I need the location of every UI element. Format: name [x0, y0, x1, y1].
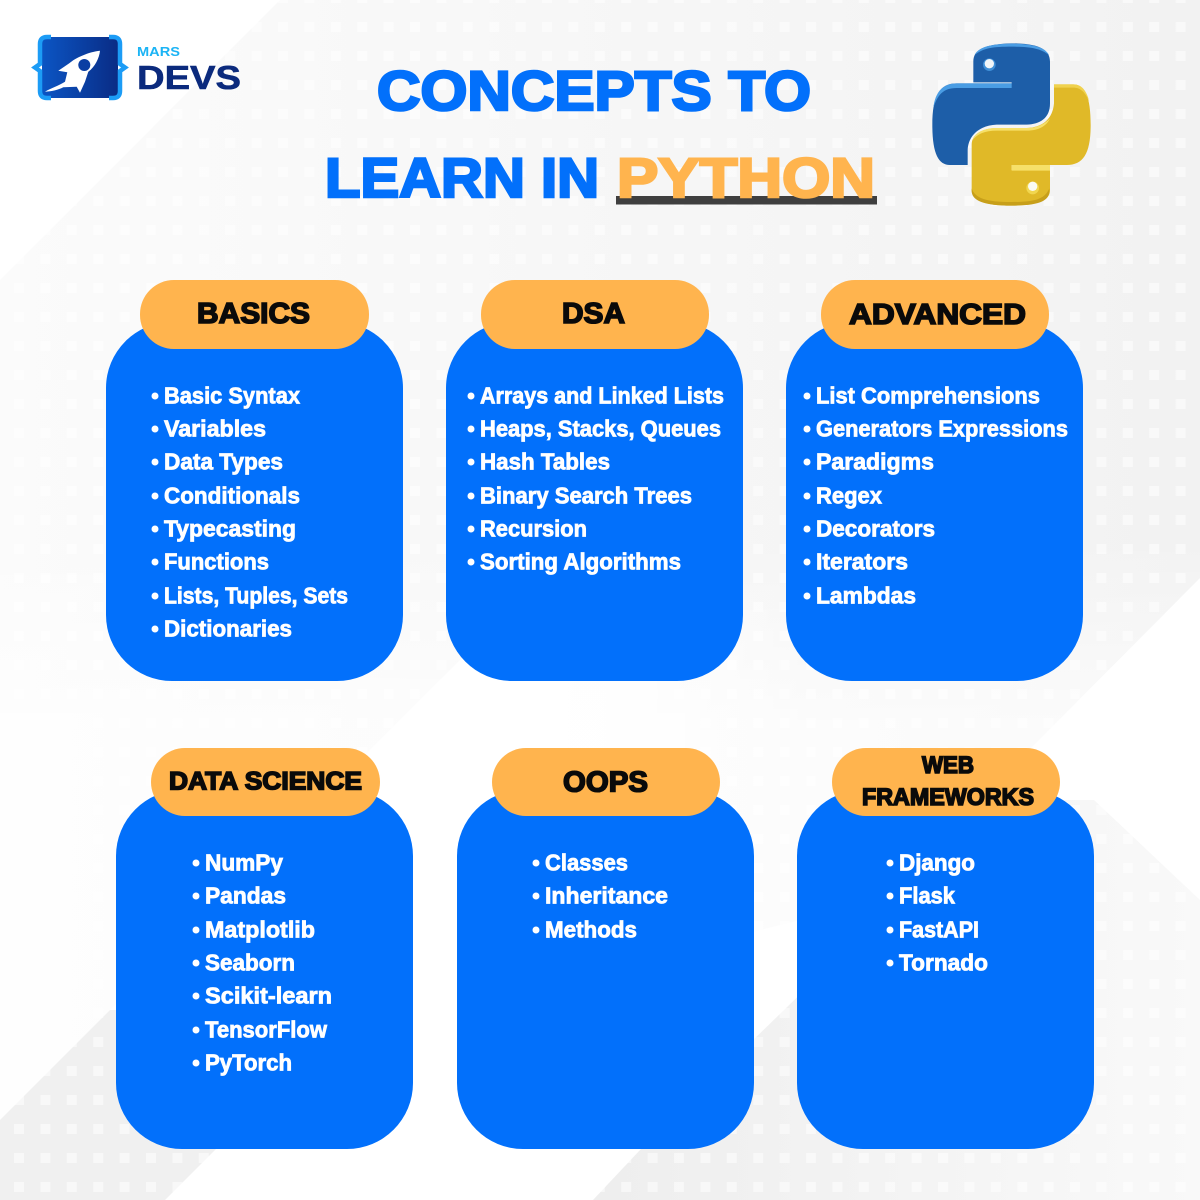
icon: python logo [932, 43, 1091, 206]
list: Binary Search Trees [480, 482, 692, 508]
list: Heaps, Stacks, Queues [480, 416, 721, 442]
pill [481, 280, 709, 349]
list: Dictionaries [164, 616, 292, 642]
panel: basics [106, 280, 403, 681]
list: Flask [899, 882, 955, 908]
icon: rocket in braces [35, 37, 125, 98]
list [532, 850, 668, 942]
pill [151, 748, 380, 816]
logo: Mars Devs [35, 37, 241, 98]
logo text: MARS: MARS [137, 44, 180, 59]
list [152, 382, 348, 642]
panel: dsa [446, 280, 743, 681]
list [804, 382, 1068, 608]
title line 1: CONCEPTS TO [377, 59, 811, 122]
heading line 1: WEB [922, 752, 974, 779]
list: Basic Syntax [164, 382, 300, 408]
list: Arrays and Linked Lists [480, 382, 724, 408]
card [446, 322, 743, 681]
panel: oops [457, 748, 754, 1149]
list: Django [899, 850, 975, 876]
panel: web frameworks [797, 748, 1094, 1149]
list: Seaborn [205, 950, 295, 976]
list [468, 382, 724, 574]
list: Lambdas [816, 582, 916, 608]
heading: OOPS [563, 766, 648, 798]
list: Typecasting [164, 516, 296, 542]
list: Variables [164, 416, 266, 442]
panel: data science [116, 748, 413, 1149]
list: Iterators [816, 548, 908, 574]
list: Lists, Tuples, Sets [164, 582, 348, 608]
list: Generators Expressions [816, 416, 1068, 442]
list: Scikit-learn [205, 982, 332, 1008]
list: Decorators [816, 516, 935, 542]
list [886, 850, 988, 976]
card [116, 790, 413, 1149]
heading: DATA SCIENCE [169, 768, 362, 796]
list: Pandas [205, 882, 286, 908]
list: Paradigms [816, 448, 934, 474]
list: PyTorch [205, 1050, 292, 1076]
list: Conditionals [164, 482, 300, 508]
list: Inheritance [545, 882, 668, 908]
heading: BASICS [197, 298, 310, 330]
card [106, 322, 403, 681]
list: Hash Tables [480, 448, 610, 474]
list: NumPy [205, 850, 283, 876]
title underline [616, 196, 877, 204]
list: TensorFlow [205, 1016, 327, 1042]
list: Recursion [480, 516, 587, 542]
title [325, 59, 877, 209]
pill [492, 748, 720, 816]
list: Methods [545, 916, 637, 942]
list: Regex [816, 482, 882, 508]
list: Sorting Algorithms [480, 548, 681, 574]
list: FastAPI [899, 916, 979, 942]
logo text: DEVS: DEVS [137, 60, 241, 97]
heading line 2: FRAMEWORKS [862, 784, 1034, 811]
list: Matplotlib [205, 916, 315, 942]
pill [832, 748, 1060, 816]
heading: ADVANCED [849, 299, 1026, 331]
list [192, 850, 332, 1076]
card [457, 790, 754, 1149]
pill [140, 280, 369, 349]
list: Functions [164, 548, 269, 574]
title highlight word: PYTHON [617, 146, 875, 209]
pill [821, 280, 1049, 349]
list: Data Types [164, 448, 283, 474]
heading: DSA [562, 298, 625, 330]
card [786, 322, 1083, 681]
title line 2: LEARN IN [325, 146, 599, 209]
card [797, 790, 1094, 1149]
list: Tornado [899, 950, 988, 976]
panel: advanced [786, 280, 1083, 681]
list: List Comprehensions [816, 382, 1040, 408]
list: Classes [545, 850, 628, 876]
